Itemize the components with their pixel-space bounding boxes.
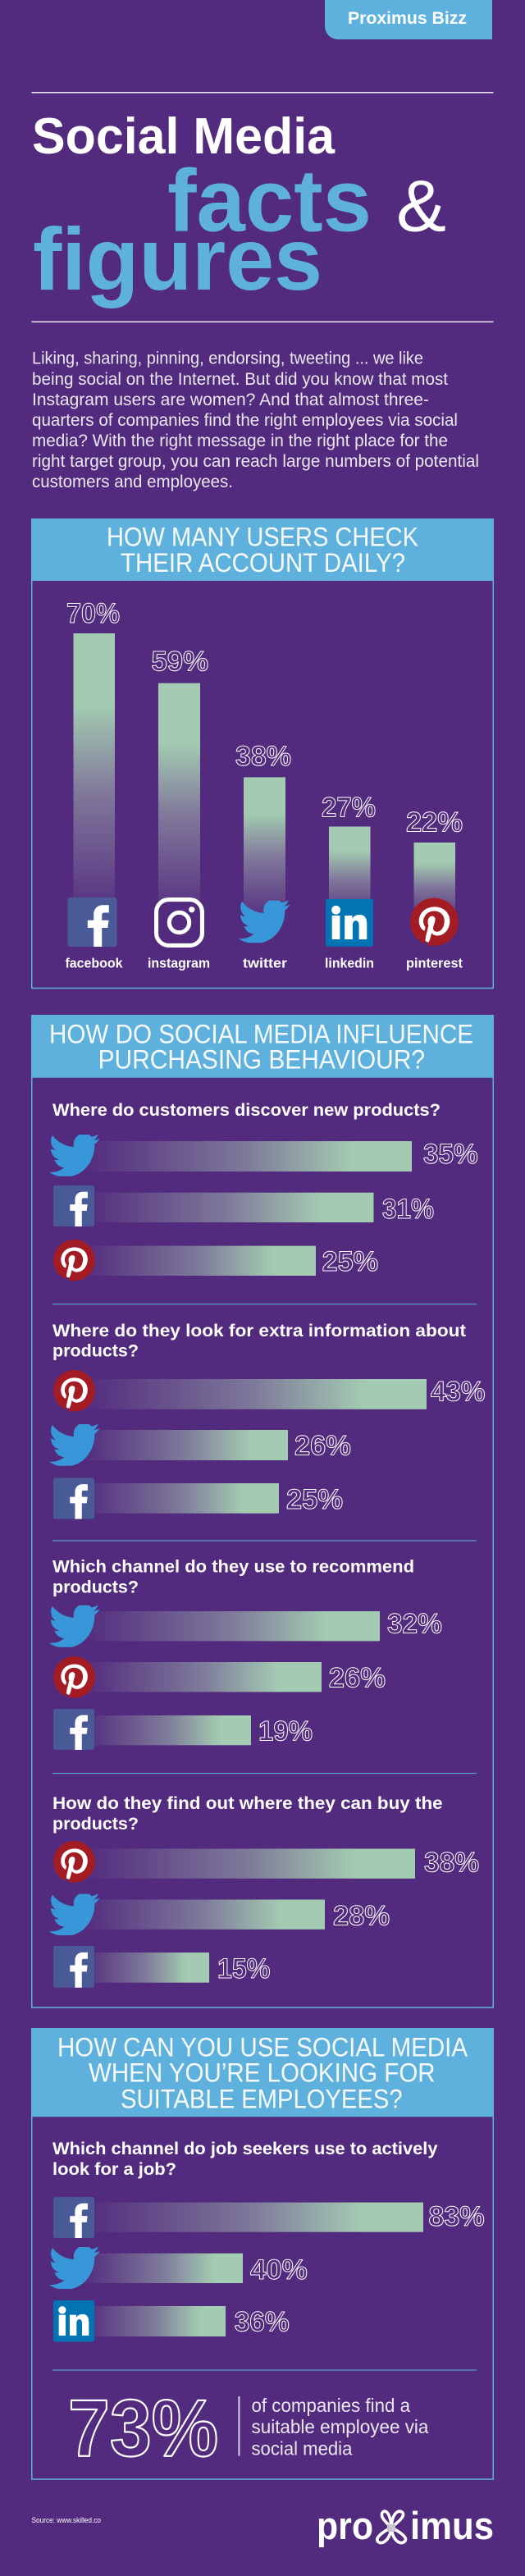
question 3: Which channel do they use to recommend [52,1557,414,1576]
heading: daily users: THEIR ACCOUNT DAILY? [121,548,405,578]
tab: Proximus Bizz [325,0,492,39]
question 4 [52,1794,443,1834]
heading: suitable employees: HOW CAN YOU USE SOCIAL MEDIA [57,2032,468,2062]
bar: facebook 19% [53,1709,313,1750]
bar: facebook 25% [53,1478,343,1519]
intro text [32,349,479,491]
bar: facebook 83%: 83% [428,2201,485,2232]
bar: twitter 35%: 35% [423,1139,477,1170]
bar: twitter 40%: 40% [250,2254,308,2286]
bar: linkedin 36%: 36% [235,2307,290,2338]
question 4: products? [52,1815,139,1834]
question 1: Where do customers discover new products? [52,1101,441,1120]
column: linkedin 27%: 27% [322,792,376,824]
bar: facebook 31%: 31% [382,1194,434,1225]
heading: purchasing behaviour: PURCHASING BEHAVIOUR? [98,1045,425,1075]
intro text: being social on the Internet. But did you know that most [32,369,448,389]
bar: facebook 15%: 15% [217,1953,270,1985]
bar: twitter 28%: 28% [333,1900,390,1931]
question 3 [52,1557,414,1597]
heading: suitable employees [31,2028,494,2117]
bar: twitter 35% [49,1133,478,1177]
callout: 73%: of companies find a [251,2395,410,2416]
column: linkedin 27%: linkedin [325,955,374,971]
question 4: How do they find out where they can buy the [52,1794,443,1813]
callout: 73%: suitable employee via [251,2416,429,2437]
bar: twitter 32%: 32% [387,1609,442,1640]
intro text: customers and employees. [32,472,233,491]
column: pinterest 22% [406,806,463,971]
question 2 [52,1322,466,1361]
panel: purchasing behaviour [31,1015,494,2007]
panel: daily users [31,518,494,988]
column: twitter 38%: twitter [243,955,287,971]
column: twitter 38%: 38% [235,741,291,772]
bar: facebook 19%: 19% [258,1716,313,1747]
question 2: Where do they look for extra information about [52,1322,466,1341]
column: instagram 59%: instagram [148,955,210,971]
callout: 73% [68,2383,429,2473]
tab: Proximus Bizz: Proximus Bizz [348,9,467,28]
title: figures [33,209,322,308]
bar: pinterest 43%: 43% [431,1377,485,1408]
heading: suitable employees: WHEN YOU’RE LOOKING FOR [89,2058,436,2087]
intro text: media? With the right message in the right place for the [32,431,448,450]
bar: pinterest 38%: 38% [424,1848,479,1879]
heading: purchasing behaviour: HOW DO SOCIAL MEDIA INFLUENCE [49,1020,473,1049]
logo: proximus: x [382,2515,399,2542]
title: Social Media [32,108,336,165]
callout: 73%: social media [251,2438,353,2460]
bar: twitter 26% [49,1423,351,1467]
title [32,108,446,308]
question 5: look for a job? [52,2160,176,2179]
heading: daily users [31,518,494,581]
bar: twitter 32% [49,1604,442,1648]
bar: pinterest 43% [53,1370,485,1412]
column: twitter 38% [235,741,291,971]
column: linkedin 27% [322,792,376,971]
bar: twitter 26%: 26% [294,1431,351,1462]
bar: facebook 83% [53,2197,485,2238]
intro text: Instagram users are women? And that almost three- [32,390,429,409]
intro text: right target group, you can reach large numbers of potential [32,451,479,471]
column: pinterest 22%: pinterest [406,955,463,971]
heading: suitable employees: SUITABLE EMPLOYEES? [121,2085,403,2114]
bar: facebook 25%: 25% [286,1484,343,1515]
bar: pinterest 38% [53,1841,479,1883]
bar: pinterest 26% [53,1656,386,1698]
column: facebook 70% [66,598,123,971]
column: instagram 59% [148,646,210,971]
bar: twitter 40% [49,2245,308,2290]
title: & [396,164,446,246]
column: instagram 59%: 59% [151,646,208,678]
bar: pinterest 25% [53,1240,378,1281]
bar: twitter 28% [49,1893,390,1936]
bar: linkedin 36% [53,2300,290,2341]
title: facts [167,151,372,249]
question 3: products? [52,1578,139,1597]
intro text: quarters of companies find the right employees via social [32,410,458,430]
heading: daily users: HOW MANY USERS CHECK [107,522,418,551]
logo: proximus [317,2504,494,2547]
bar: facebook 31% [53,1185,434,1226]
column: facebook 70%: 70% [66,598,120,629]
heading: purchasing behaviour [31,1015,494,1078]
column: facebook 70%: facebook [66,955,123,971]
callout: 73%: 73% [68,2383,218,2473]
question 2: products? [52,1342,139,1361]
question 5 [52,2140,438,2179]
question 5: Which channel do job seekers use to actively [52,2140,438,2158]
bar: pinterest 25%: 25% [322,1246,378,1277]
bar: facebook 15% [53,1946,270,1988]
bar: pinterest 26%: 26% [329,1663,386,1694]
logo: proximus: pro [317,2504,373,2547]
source note: Source: www.skilled.co [31,2516,101,2524]
intro text: Liking, sharing, pinning, endorsing, tweeting ... we like [32,349,423,368]
panel: suitable employees [31,2028,494,2479]
logo: proximus: imus [410,2504,494,2547]
column: pinterest 22%: 22% [406,806,463,838]
